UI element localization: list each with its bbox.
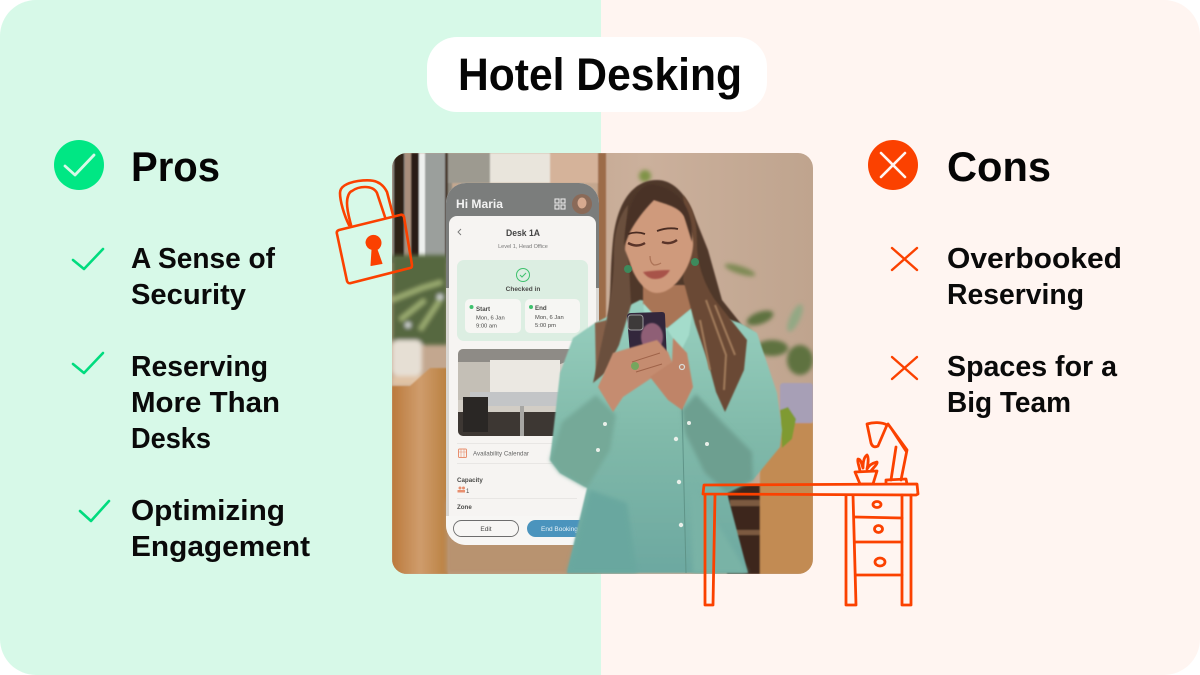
capacity and zone rows: 1	[466, 489, 470, 495]
phone app screen: Desk 1A	[506, 228, 540, 238]
hair right lock	[683, 195, 747, 412]
hands	[598, 338, 693, 412]
con item: spaces for a big team: Spaces for a	[947, 351, 1118, 383]
capacity and zone rows: Zone	[457, 504, 472, 511]
pro item: optimizing engagement: Engagement	[131, 531, 310, 563]
phone bottom buttons	[446, 516, 580, 545]
handheld phone	[627, 312, 667, 352]
pro item: optimizing engagement	[80, 495, 310, 563]
drawers	[855, 517, 902, 575]
phone content card	[449, 216, 596, 288]
checked in panel: Mon, 6 Jan	[535, 315, 564, 321]
phone bottom buttons: Edit	[480, 526, 492, 533]
phone greeting header	[456, 194, 592, 214]
icon: padlock	[337, 180, 412, 283]
desk lamp	[867, 423, 887, 447]
checked in panel: Mon, 6 Jan	[476, 316, 505, 322]
checked in panel: Checked in	[506, 286, 540, 293]
hair back	[607, 179, 743, 325]
con item: overbooked reserving: Overbooked	[947, 243, 1122, 275]
capacity and zone rows	[457, 477, 577, 511]
panel: pros	[54, 140, 310, 563]
desk top	[703, 484, 918, 495]
checked in panel: 5:00 pm	[535, 323, 556, 329]
icon: cons x circle	[868, 140, 918, 190]
title pill: Hotel Desking	[458, 49, 742, 100]
heading: cons: Cons	[947, 143, 1051, 190]
checked in panel	[457, 260, 588, 341]
bag strap	[594, 320, 607, 374]
icon: pros check circle	[54, 140, 104, 190]
shirt body	[550, 300, 782, 573]
right plant, pot and cabinet	[727, 383, 813, 574]
desk legs	[705, 495, 715, 605]
icon: desk with drawers, plant and lamp	[703, 423, 918, 605]
pro item: reserving more than desks: Reserving	[131, 351, 268, 383]
phone greeting header: Hi Maria	[456, 199, 504, 211]
face	[625, 199, 693, 293]
title pill	[427, 37, 767, 112]
neck and collar	[643, 285, 693, 329]
pro item: reserving more than desks	[73, 351, 280, 455]
availability calendar row	[457, 443, 552, 464]
panel: cons	[868, 140, 1122, 419]
heading: pros: Pros	[131, 143, 220, 190]
woman figure	[550, 180, 782, 573]
earrings	[624, 265, 632, 273]
pro item: reserving more than desks: Desks	[131, 423, 211, 455]
availability calendar row: Availability Calendar	[473, 450, 529, 458]
phone app screen: Level 1, Head Office	[498, 244, 548, 250]
office room photo	[458, 349, 578, 436]
photo background office	[392, 153, 813, 574]
plant pot	[855, 455, 877, 484]
con item: overbooked reserving	[892, 243, 1122, 311]
pro item: optimizing engagement: Optimizing	[131, 495, 285, 527]
shirt shading	[550, 394, 753, 573]
hair left lock	[593, 205, 631, 383]
con item: spaces for a big team: Big Team	[947, 387, 1071, 419]
checked in panel: Start	[476, 306, 490, 313]
phone bottom buttons: End Booking	[541, 526, 578, 533]
pro item: reserving more than desks: More Than	[131, 387, 280, 419]
capacity and zone rows: Capacity	[457, 477, 483, 484]
checked in panel: 9:00 am	[476, 324, 497, 330]
shirt placket and buttons	[596, 408, 709, 573]
photo: woman holding phone	[392, 153, 813, 574]
left plant and pot	[392, 255, 448, 386]
con item: overbooked reserving: Reserving	[947, 279, 1084, 311]
phone app screen	[446, 183, 599, 545]
con item: spaces for a big team	[892, 351, 1118, 419]
pro item: a sense of security: Security	[131, 279, 246, 311]
checked in panel: End	[535, 305, 547, 312]
pro item: a sense of security	[73, 243, 275, 311]
pro item: a sense of security: A Sense of	[131, 243, 275, 275]
